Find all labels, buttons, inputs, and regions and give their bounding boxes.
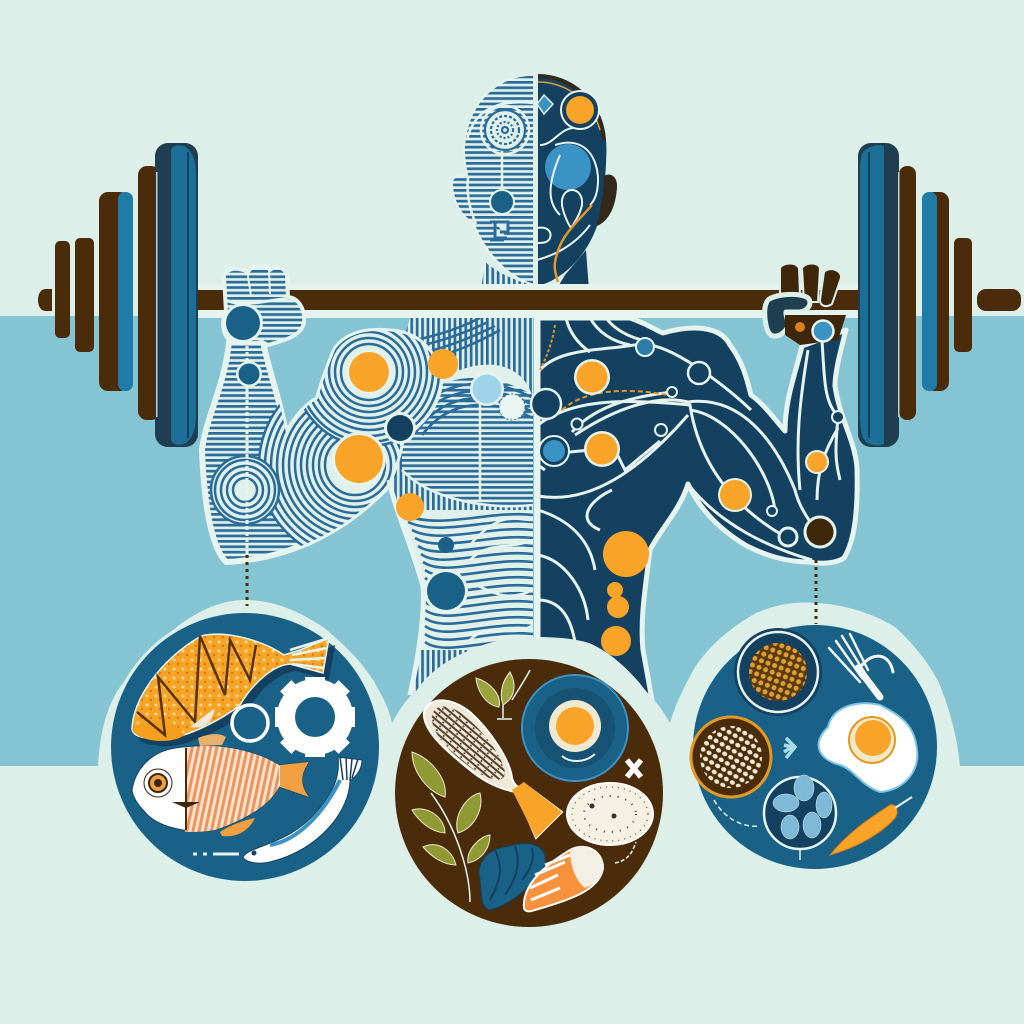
left plates	[55, 143, 198, 447]
left stub	[38, 289, 52, 311]
dashes	[193, 852, 239, 856]
left neck	[481, 262, 533, 290]
right neck	[556, 250, 589, 290]
x mark	[627, 760, 641, 777]
bar halo	[198, 284, 860, 318]
gear	[275, 677, 355, 757]
pill bowl	[764, 775, 836, 860]
seed bowl	[691, 717, 771, 797]
dashed trail	[615, 842, 636, 863]
bar	[196, 290, 862, 310]
food circle: fish	[111, 613, 379, 881]
right plates	[858, 143, 972, 447]
food circle halos: left and right	[98, 600, 960, 800]
chest block	[402, 365, 533, 506]
food circle: blue	[691, 625, 937, 869]
leaves	[412, 670, 530, 902]
left arm and shoulder	[199, 328, 443, 565]
background: upper mint band	[0, 0, 1024, 316]
barbell	[38, 143, 1021, 447]
centre divider	[534, 310, 538, 660]
dotted connector right	[814, 560, 818, 624]
left torso	[385, 318, 533, 695]
centre food halo	[392, 637, 672, 800]
left head	[452, 75, 533, 285]
blue plate	[522, 675, 628, 781]
figure: striped left half and dark right half	[202, 75, 857, 700]
right body dark	[538, 318, 857, 700]
background: middle blue band	[0, 316, 1024, 767]
carrot	[830, 797, 912, 855]
grain bowl	[734, 628, 822, 716]
rice bowl	[567, 783, 653, 845]
dotted connector left	[246, 555, 248, 606]
node circles: right	[531, 338, 844, 656]
left torso white outline	[389, 480, 423, 695]
orange fish	[132, 634, 335, 746]
salmon	[524, 847, 603, 911]
dashed trail	[714, 800, 760, 826]
sardine	[243, 757, 362, 863]
ring	[232, 705, 268, 741]
lower torso wavy bands	[395, 510, 533, 650]
right stub	[977, 289, 1021, 311]
food circle: brown	[395, 659, 663, 927]
blue bread	[479, 844, 545, 910]
fried egg	[819, 703, 917, 792]
right hand	[765, 264, 846, 345]
background: lower mint band	[0, 766, 1024, 1024]
paddle	[424, 700, 562, 838]
arrow mark	[784, 738, 795, 758]
right head	[537, 75, 617, 286]
white fish	[132, 734, 309, 836]
node circles: left	[236, 349, 525, 613]
left hand	[223, 266, 304, 345]
fork	[829, 634, 893, 697]
